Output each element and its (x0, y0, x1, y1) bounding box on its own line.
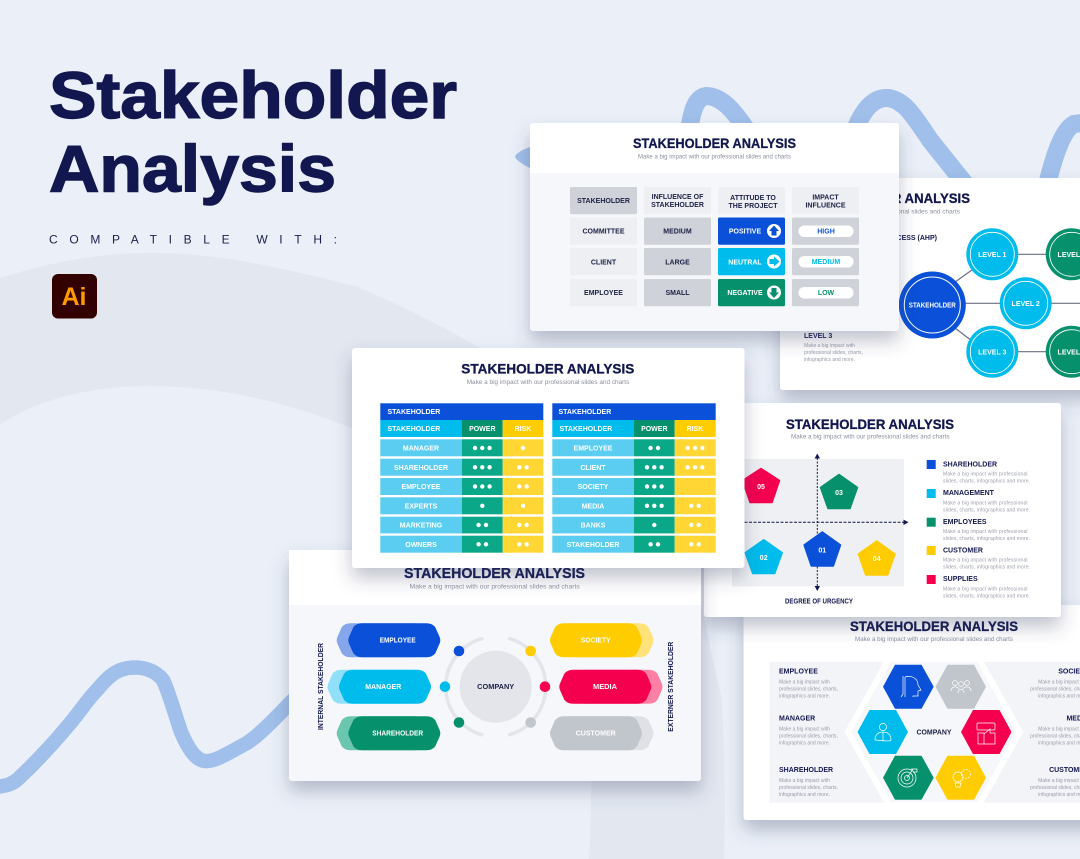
process label: PROCESS (AHP) (881, 235, 937, 242)
column 3: ATTITUDE TO (730, 195, 776, 202)
main title: Stakeholder (49, 58, 457, 132)
ring dots (440, 646, 550, 728)
background shape: grey wave (0, 253, 560, 450)
stakeholder node: STAKEHOLDER (909, 302, 956, 310)
stakeholder node (899, 272, 966, 338)
level 3 text (804, 333, 863, 363)
left labels: Make a big impact with (779, 726, 830, 732)
pentagon 03 (820, 474, 858, 508)
left labels: SHAREHOLDER (779, 767, 833, 774)
right table (552, 403, 716, 553)
connector lines (955, 254, 1080, 352)
heading: STAKEHOLDER ANALYSIS (461, 360, 634, 376)
left table: MANAGER (403, 446, 439, 452)
left table: STAKEHOLDER (388, 426, 440, 433)
left labels: MANAGER (779, 716, 815, 722)
column 1: STAKEHOLDER (577, 198, 630, 205)
legend: slides, charts, infographics and more. (943, 479, 1030, 485)
right table: SOCIETY (578, 484, 609, 491)
chart area (732, 459, 904, 586)
left labels: EMPLOYEE (779, 668, 818, 676)
pill: employee: EMPLOYEE (380, 638, 416, 644)
level 3 node (966, 326, 1018, 378)
pentagon 04: 04 (873, 556, 881, 563)
level 2 node: LEVEL 2 (1012, 301, 1040, 308)
pentagon 03: 03 (835, 490, 843, 497)
right labels (1030, 668, 1080, 798)
left labels: Make a big impact with (779, 778, 830, 784)
column 2: STAKEHOLDER (651, 202, 704, 209)
pill: customer (550, 716, 654, 750)
subtitle: Make a big impact with our professional slides and charts (791, 434, 950, 441)
subtitle: Make a big impact with our professional slides and charts (855, 636, 1014, 643)
right table: MEDIA (582, 504, 604, 510)
level 2 node (1000, 277, 1052, 329)
hexagon: target icon (883, 756, 934, 800)
brush stroke: lower left (0, 668, 295, 787)
left table: MARKETING (400, 522, 443, 530)
right table: BANKS (581, 522, 606, 530)
left table: POWER (469, 426, 496, 433)
left table: EXPERTS (405, 504, 438, 510)
left table: RISK (515, 426, 531, 433)
hexagon: idea gear icon (936, 756, 986, 800)
column 1: CLIENT (591, 260, 617, 266)
company label: COMPANY (916, 730, 952, 736)
column 3: NEGATIVE (727, 290, 763, 297)
subtitle: Make a big impact with our professional slides and charts (467, 379, 630, 386)
pill: customer: CUSTOMER (576, 730, 616, 738)
right table: EMPLOYEE (574, 446, 613, 452)
legend (927, 460, 1030, 599)
legend: EMPLOYEES (943, 519, 987, 526)
pentagon 02: 02 (760, 555, 768, 562)
legend: SUPPLIES (943, 576, 978, 583)
legend: CUSTOMER (943, 548, 983, 554)
level 3 node: LEVEL 3 (978, 349, 1007, 356)
legend: Make a big impact with professional (943, 529, 1028, 535)
column 4 (792, 187, 859, 306)
column 3 (718, 187, 785, 306)
grey band (770, 662, 1080, 803)
left labels: professional slides, charts, (779, 785, 838, 791)
ring arcs (446, 639, 546, 735)
legend: MANAGEMENT (943, 490, 995, 497)
hexagon: people icon (936, 665, 986, 709)
left labels (779, 668, 838, 798)
panel: attitude table (530, 123, 899, 331)
level 1 node: LEVEL 1 (978, 252, 1007, 259)
panel: priority matrix (704, 403, 1061, 617)
level 3 text: infographics and more. (804, 357, 855, 363)
right table: CLIENT (580, 465, 606, 472)
level 3 text: LEVEL 3 (804, 333, 832, 340)
heading: STAKEHOLDER ANALYSIS (850, 618, 1018, 634)
left table: STAKEHOLDER (388, 409, 440, 416)
pill: media: MEDIA (593, 684, 617, 691)
column 4: HIGH (817, 228, 835, 236)
heading: STAKEHOLDER ANALYSIS (633, 135, 796, 151)
company circle: COMPANY (477, 684, 515, 691)
subtitle: Make a big impact with our professional slides and charts (638, 154, 792, 160)
legend: slides, charts, infographics and more. (943, 536, 1030, 542)
column 4: MEDIUM (812, 259, 840, 266)
right table: STAKEHOLDER (558, 409, 611, 416)
column 1: EMPLOYEE (584, 290, 623, 297)
column 3: THE PROJECT (728, 203, 778, 210)
pill: society (550, 623, 654, 657)
vertical axis arrow (815, 454, 820, 591)
right table: RISK (687, 426, 703, 433)
column 2 (644, 187, 711, 306)
right table: STAKEHOLDER (560, 426, 612, 433)
subtitle: Make a big impact with our professional slides and charts (410, 583, 580, 590)
left labels: professional slides, charts, (779, 686, 838, 692)
internal label: INTERNAL STAKEHOLDER (318, 643, 325, 730)
company circle (460, 651, 532, 723)
hexagon: employee head icon (883, 665, 934, 709)
level 3 text: Make a big impact with (804, 343, 855, 349)
compatible with label: COMPATIBLE WITH: (49, 232, 337, 246)
pentagon 02 (745, 540, 782, 574)
level 1 node (966, 228, 1018, 280)
pentagon 05 (742, 468, 780, 502)
main title (49, 58, 457, 206)
legend: Make a big impact with professional (943, 472, 1028, 478)
lower green node (1046, 326, 1080, 378)
column 3: POSITIVE (729, 228, 761, 236)
left table: SHAREHOLDER (394, 465, 448, 472)
legend: slides, charts, infographics and more. (943, 507, 1030, 513)
left table: OWNERS (405, 542, 437, 549)
main title: Analysis (49, 132, 336, 206)
left labels: infographics and more. (779, 792, 830, 798)
column 3: NEUTRAL (728, 260, 762, 266)
column 2: MEDIUM (663, 228, 692, 236)
legend: SHAREHOLDER (943, 462, 997, 468)
column 4: LOW (818, 290, 835, 297)
pill: manager: MANAGER (365, 684, 401, 691)
heading: STAKEHOLDER ANALYSIS (786, 416, 954, 432)
legend: slides, charts, infographics and more. (943, 565, 1030, 571)
subtitle: Make a big impact with our professional slides and charts (795, 208, 961, 216)
upper green node (1046, 228, 1080, 280)
right table: POWER (641, 426, 668, 433)
pentagon 05: 05 (757, 484, 765, 491)
panel: power and risk tables (352, 348, 744, 568)
hexagon frame (848, 659, 1020, 805)
pill: society: SOCIETY (581, 638, 611, 644)
pill: employee (337, 623, 440, 657)
legend: Make a big impact with professional (943, 558, 1028, 564)
legend: Make a big impact with professional (943, 500, 1028, 506)
horizontal axis arrow (740, 520, 908, 525)
icon: adobe illustrator (52, 274, 97, 318)
legend: slides, charts, infographics and more. (943, 593, 1030, 599)
column 2: LARGE (665, 260, 690, 266)
axis label: DEGREE OF URGENCY (785, 598, 853, 606)
panel: hexagon company (744, 605, 1080, 820)
heading: STAKEHOLDER ANALYSIS (404, 565, 585, 582)
panel: internal and external stakeholders (289, 550, 701, 781)
external label: EXTERNER STAKEHOLDER (668, 642, 675, 732)
left labels: infographics and more. (779, 740, 830, 746)
column 1: COMMITTEE (582, 228, 625, 236)
pill: manager (328, 670, 431, 704)
left table: EMPLOYEE (402, 484, 441, 491)
column 2: INFLUENCE OF (652, 194, 704, 201)
icon: adobe illustrator: Ai (62, 283, 86, 311)
brush stroke: upper right (515, 96, 1080, 185)
hexagon: thumbs up icon (961, 710, 1012, 754)
hexagon: manager icon (858, 710, 908, 754)
left labels: professional slides, charts, (779, 734, 838, 740)
level 3 text: professional slides, charts, (804, 350, 863, 356)
pill: shareholder: SHAREHOLDER (372, 730, 423, 738)
pentagon 01: 01 (818, 548, 826, 554)
pill: media (559, 670, 662, 704)
right table: STAKEHOLDER (567, 542, 619, 549)
column 4: INFLUENCE (805, 202, 846, 210)
column 4: IMPACT (812, 194, 839, 202)
background shape: grey column (589, 600, 725, 859)
left labels: infographics and more. (779, 694, 830, 700)
column 1 (570, 187, 637, 306)
panel: AHP levels (780, 178, 1080, 390)
pentagon 01 (804, 532, 840, 566)
left table (380, 403, 543, 553)
column 2: SMALL (665, 290, 690, 297)
pentagon 04 (858, 541, 895, 575)
pill: shareholder (337, 716, 440, 750)
heading: STAKEHOLDER ANALYSIS (802, 190, 970, 206)
legend: Make a big impact with professional (943, 586, 1028, 592)
left labels: Make a big impact with (779, 680, 830, 686)
